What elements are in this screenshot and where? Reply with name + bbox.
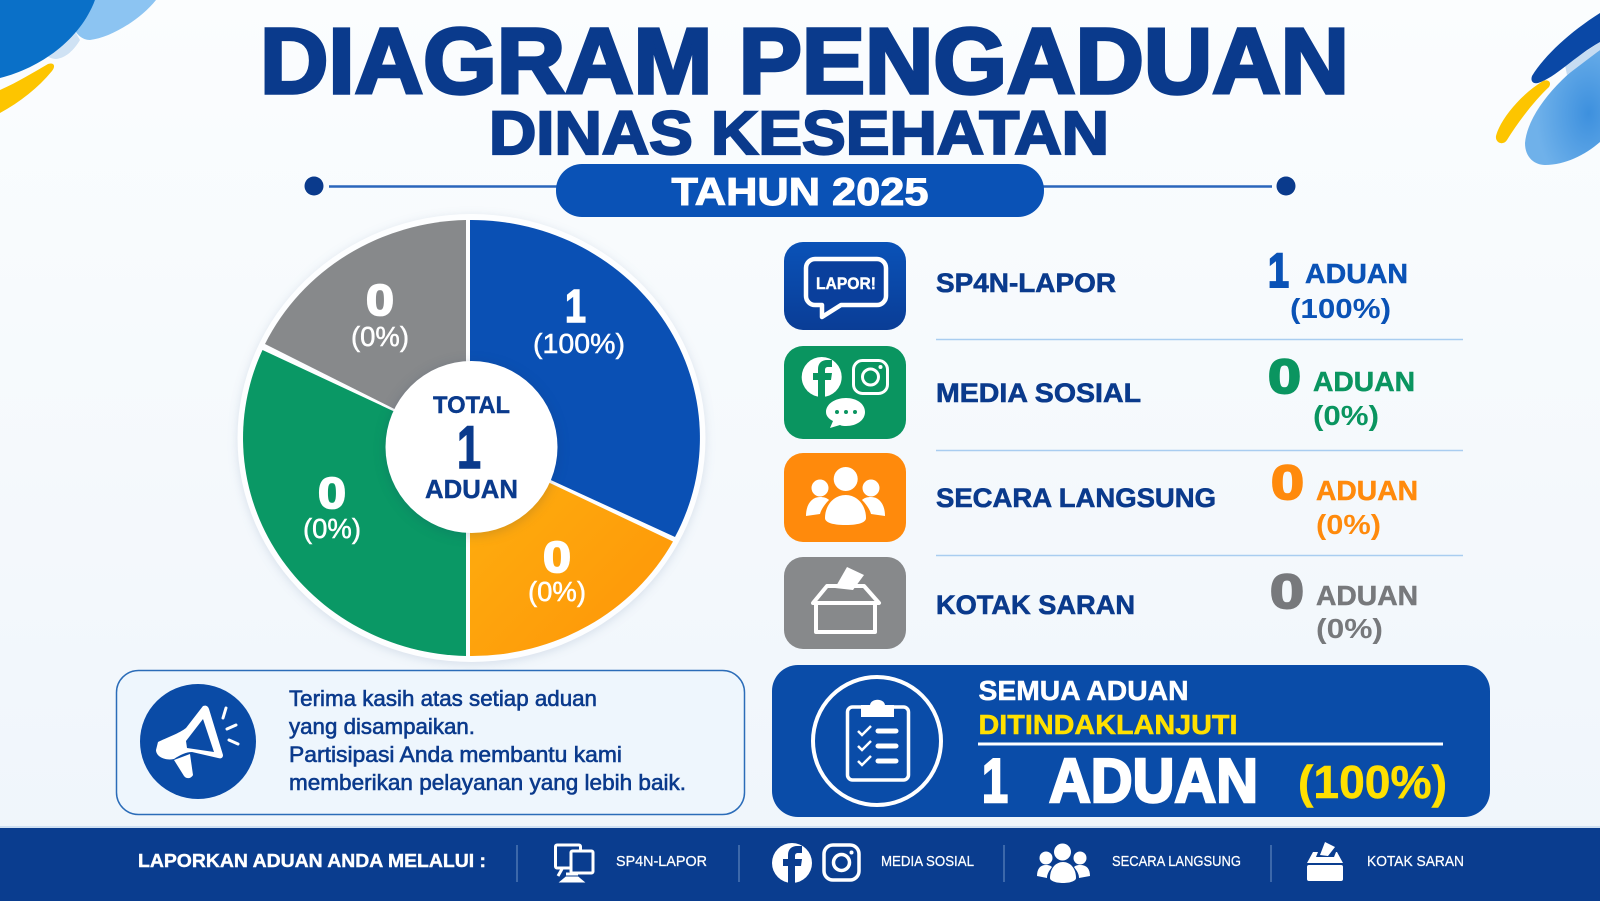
- icon: clipboard: [813, 677, 941, 805]
- value: 0: [1271, 457, 1304, 510]
- label: MEDIA SOSIAL: [936, 378, 1141, 408]
- slice: media sosial: [243, 350, 466, 656]
- footer icon: people: [1037, 844, 1090, 883]
- label: SP4N-LAPOR value: (100%): [533, 328, 625, 359]
- centre total: TOTAL: [433, 392, 510, 419]
- label: SP4N-LAPOR: [936, 268, 1116, 298]
- label: KOTAK SARAN: [936, 590, 1135, 620]
- slice: kotak saran: [265, 220, 466, 445]
- panel: thank-you message: [116, 670, 744, 814]
- footer icon: facebook and instagram: [772, 843, 859, 883]
- value: 1: [1268, 245, 1289, 298]
- value: (0%): [1316, 509, 1381, 540]
- label: kotak saran value: [351, 276, 409, 352]
- footer item: SP4N-LAPOR: SP4N-LAPOR: [616, 854, 707, 870]
- value: (0%): [1313, 400, 1379, 431]
- value: 0: [1268, 351, 1301, 404]
- title: DIAGRAM PENGADUAN: [260, 9, 1349, 113]
- slice: SP4N-LAPOR: [470, 220, 700, 537]
- row: secara langsung: [784, 453, 1418, 542]
- icon: lapor speech bubble: LAPOR!: [816, 274, 876, 293]
- footer icon: computer: [556, 845, 593, 882]
- label: SECARA LANGSUNG: [936, 483, 1216, 513]
- footer item: kotak saran: KOTAK SARAN: [1367, 854, 1464, 870]
- value: [1268, 351, 1415, 431]
- highlighted heading: DITINDAKLANJUTI: [978, 709, 1238, 740]
- label: SP4N-LAPOR value: 1: [565, 280, 586, 332]
- footer item: media sosial: MEDIA SOSIAL: [881, 854, 974, 870]
- icon: lapor speech bubble: [784, 242, 906, 330]
- icon: suggestion box: [784, 557, 906, 649]
- centre total: [386, 361, 558, 533]
- label: secara langsung value: 0: [543, 533, 571, 582]
- value: [1268, 245, 1408, 324]
- message text: yang disampaikan.: [289, 714, 475, 739]
- heading: SEMUA ADUAN: [978, 675, 1188, 706]
- footer label: LAPORKAN ADUAN ANDA MELALUI :: [138, 850, 486, 871]
- value: (0%): [1316, 613, 1383, 644]
- total count: (100%): [1298, 756, 1447, 808]
- value: [1271, 457, 1418, 540]
- centre total: ADUAN: [425, 474, 518, 504]
- label: SP4N-LAPOR value: [533, 280, 625, 359]
- year banner: [304, 164, 1296, 217]
- total count: ADUAN: [1049, 747, 1258, 816]
- panel: follow-up summary: [772, 665, 1490, 817]
- year banner: TAHUN 2025: [672, 171, 928, 214]
- label: secara langsung value: (0%): [528, 576, 586, 607]
- icon: social media: [784, 346, 906, 439]
- label: kotak saran value: 0: [366, 276, 394, 325]
- message text: memberikan pelayanan yang lebih baik.: [289, 770, 686, 795]
- message text: [289, 686, 686, 795]
- row: media sosial: [784, 346, 1415, 439]
- message text: Terima kasih atas setiap aduan: [289, 686, 597, 711]
- footer item: secara langsung: SECARA LANGSUNG: [1112, 854, 1241, 870]
- value: ADUAN: [1313, 366, 1415, 397]
- label: media sosial value: (0%): [303, 513, 361, 544]
- value: (100%): [1290, 293, 1391, 324]
- slice: secara langsung: [470, 445, 673, 656]
- decoration: top-right corner shapes: [1496, 13, 1600, 165]
- total count: [982, 747, 1447, 816]
- value: 0: [1270, 566, 1304, 619]
- message text: Partisipasi Anda membantu kami: [289, 742, 622, 767]
- label: secara langsung value: [528, 533, 586, 607]
- centre total: 1: [457, 414, 481, 481]
- value: ADUAN: [1316, 475, 1418, 506]
- label: media sosial value: 0: [318, 469, 346, 518]
- decoration: top-left corner shapes: [0, 0, 156, 113]
- row: SP4N-LAPOR: [784, 242, 1408, 330]
- label: media sosial value: [303, 469, 361, 544]
- row: kotak saran: [784, 557, 1418, 649]
- pie chart: [238, 214, 706, 662]
- value: ADUAN: [1305, 258, 1408, 289]
- value: [1270, 566, 1418, 644]
- total count: 1: [982, 747, 1008, 816]
- icon: megaphone: [140, 684, 256, 799]
- footer icon: ballot box: [1307, 842, 1343, 881]
- subtitle: DINAS KESEHATAN: [489, 99, 1109, 167]
- icon: people: [784, 453, 906, 542]
- footer bar: [0, 826, 1600, 901]
- label: kotak saran value: (0%): [351, 321, 409, 352]
- value: ADUAN: [1316, 580, 1418, 611]
